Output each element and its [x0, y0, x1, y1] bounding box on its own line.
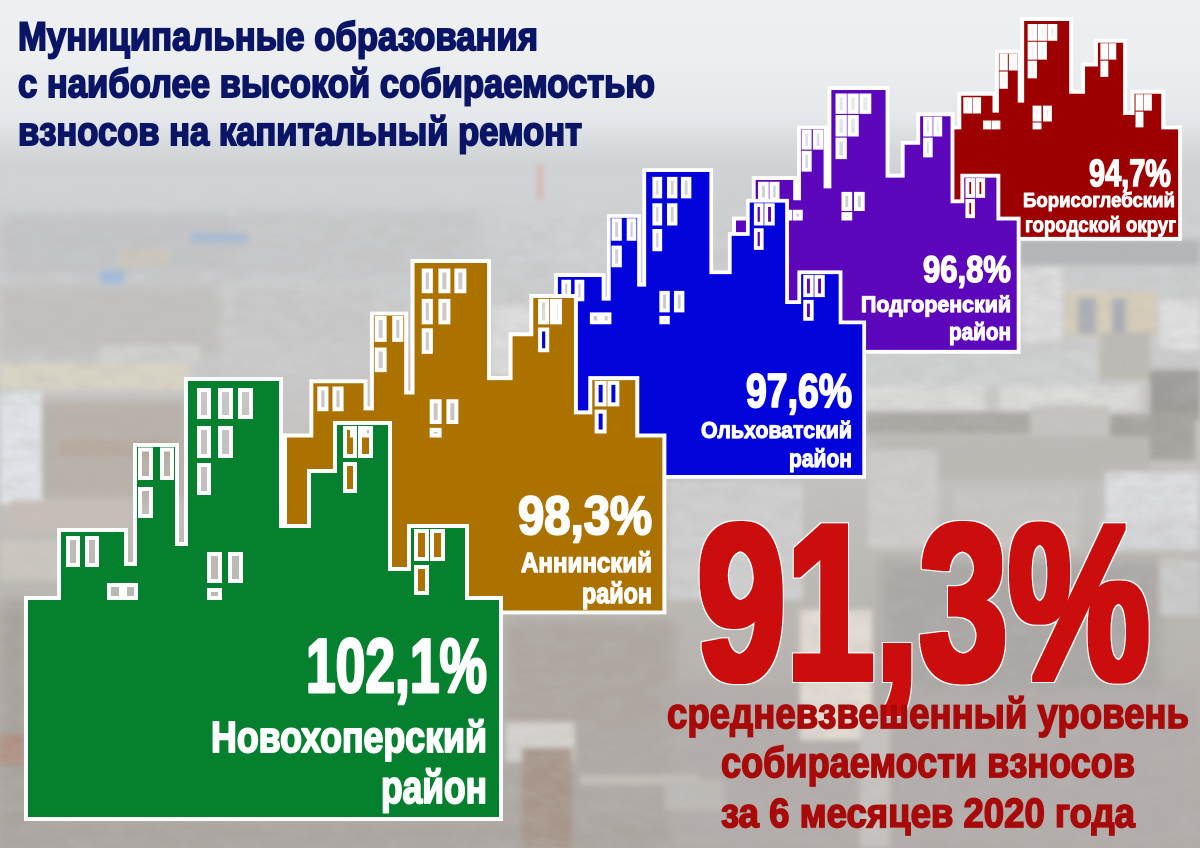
label: 94,7% Борисоглебский городской округ: 94,7%: [1089, 153, 1171, 195]
title: взносов на капитальный ремонт: [18, 110, 582, 154]
label: 97,6% Ольховатский район: Ольховатский: [701, 417, 852, 443]
label: 97,6% Ольховатский район: [701, 364, 852, 473]
label: 94,7% Борисоглебский городской округ: городской округ: [1025, 213, 1176, 237]
label: 97,6% Ольховатский район: район: [789, 445, 852, 473]
building: Аннинский район (brown): [287, 263, 662, 610]
label: 98,3% Аннинский район: Аннинский: [521, 547, 652, 578]
title: Муниципальные образования: [18, 15, 538, 59]
label: 102,1% Новохоперский район: 102,1%: [306, 624, 487, 709]
label: 97,6% Ольховатский район: 97,6%: [746, 364, 852, 417]
label: 102,1% Новохоперский район: Новохоперский: [211, 713, 487, 762]
label: 96,8% Подгоренский район: район: [949, 319, 1011, 346]
caption: средневзвешенный уровень собираемости: [667, 690, 1189, 836]
caption: средневзвешенный уровень собираемости: собираемости взносов: [721, 739, 1135, 787]
building: Новохоперский район (green): [28, 381, 499, 817]
label: 96,8% Подгоренский район: [861, 249, 1011, 346]
label: 98,3% Аннинский район: [518, 486, 652, 610]
building: Борисоглебский городской округ (dark red): [954, 21, 1178, 237]
label: 98,3% Аннинский район: 98,3%: [518, 486, 652, 546]
title: [18, 15, 655, 154]
label: 102,1% Новохоперский район: [211, 624, 487, 813]
label: 96,8% Подгоренский район: 96,8%: [923, 249, 1011, 290]
label: 102,1% Новохоперский район: район: [381, 761, 487, 813]
building: Подгоренский район (purple): [736, 90, 1017, 350]
caption: средневзвешенный уровень собираемости: за 6 месяцев 2020 года: [721, 790, 1136, 836]
title: с наиболее высокой собираемостью: [18, 62, 655, 106]
label: 98,3% Аннинский район: район: [582, 578, 652, 610]
label: 94,7% Борисоглебский городской округ: Борисоглебский: [1023, 189, 1175, 212]
label: 94,7% Борисоглебский городской округ: [1023, 153, 1176, 237]
building: Ольховатский район (blue): [535, 172, 862, 475]
label: 96,8% Подгоренский район: Подгоренский: [861, 292, 1011, 317]
